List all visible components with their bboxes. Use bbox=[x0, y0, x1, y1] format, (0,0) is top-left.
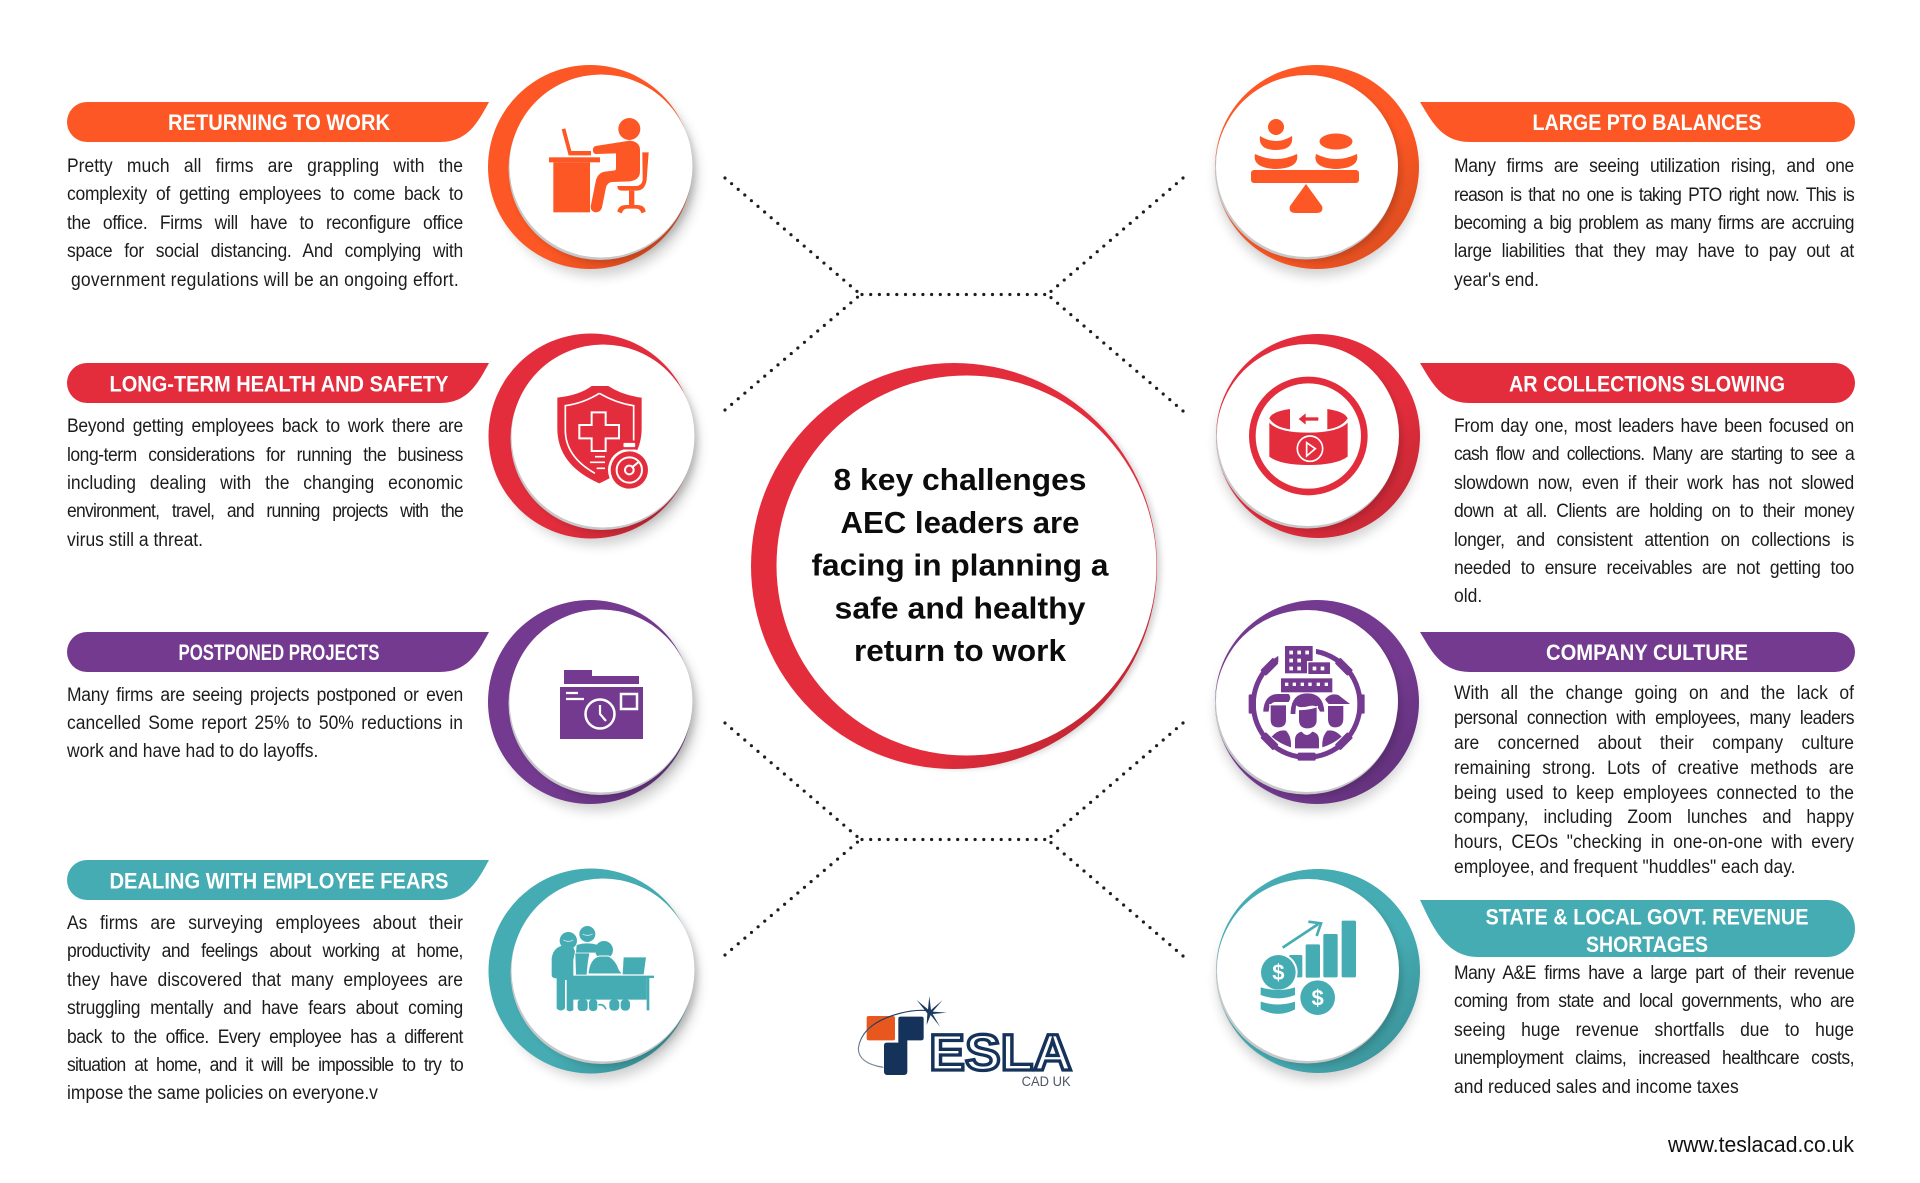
panel: state and local govt revenue shortages bbox=[1213, 869, 1855, 1098]
title: AEC leaders are bbox=[840, 505, 1080, 540]
text: returning to work: complexity of getting employees to come back to bbox=[67, 184, 463, 205]
text: state and local govt revenue shortages: and reduced sales and income taxes bbox=[1454, 1077, 1739, 1098]
badge: company culture bbox=[1212, 600, 1422, 816]
logo: Tesla CAD UK bbox=[858, 996, 1073, 1089]
badge: long-term health and safety bbox=[488, 334, 703, 550]
text: postponed projects: cancelled Some report 25% to 50% reductions in bbox=[67, 713, 463, 734]
text: dealing with employee fears: they have discovered that many employees are bbox=[67, 970, 463, 991]
heading: dealing with employee fears: DEALING WITH EMPLOYEE FEARS bbox=[110, 868, 448, 894]
text: returning to work bbox=[67, 156, 463, 291]
heading: large pto balances bbox=[1420, 102, 1855, 142]
text: long-term health and safety: environment, travel, and running projects with the bbox=[67, 501, 463, 522]
title bbox=[812, 462, 1109, 668]
heading: ar collections slowing bbox=[1420, 363, 1855, 403]
icon: bars and coins bbox=[1259, 921, 1356, 1015]
logo mark: star bbox=[917, 996, 947, 1027]
central title circle bbox=[751, 363, 1163, 771]
icon: gear with buildings and team bbox=[1249, 639, 1365, 761]
panel: company culture bbox=[1212, 600, 1855, 878]
logo wordmark: ESLA bbox=[929, 1024, 1072, 1081]
panel: dealing with employee fears bbox=[67, 860, 703, 1104]
icon: rotating band with play button bbox=[1252, 380, 1364, 492]
text: postponed projects: Many firms are seeing projects postponed or even bbox=[67, 684, 463, 706]
text: ar collections slowing: down at all. Clients are holding on to their money bbox=[1454, 501, 1854, 522]
text: state and local govt revenue shortages bbox=[1454, 963, 1854, 1098]
text: large pto balances: becoming a big problem as many firms are accruing bbox=[1454, 213, 1854, 234]
text: ar collections slowing: slowdown now, even if their work has not slowed bbox=[1454, 473, 1854, 494]
panel: AR collections slowing bbox=[1213, 334, 1855, 607]
text: state and local govt revenue shortages: Many A&E firms have a large part of their revenue bbox=[1454, 963, 1854, 984]
website url: www.teslacad.co.uk bbox=[1667, 1132, 1855, 1157]
text: state and local govt revenue shortages: coming from state and local governments, who are bbox=[1454, 991, 1854, 1012]
text: large pto balances: year's end. bbox=[1454, 270, 1539, 291]
text: company culture: company, including Zoom lunches and happy bbox=[1454, 807, 1854, 828]
heading: postponed projects: POSTPONED PROJECTS bbox=[178, 640, 380, 665]
heading: large pto balances: LARGE PTO BALANCES bbox=[1532, 110, 1762, 135]
icon: folder with clock bbox=[560, 670, 643, 739]
text: postponed projects: work and have had to do layoffs. bbox=[67, 741, 318, 762]
heading: dealing with employee fears bbox=[67, 860, 489, 900]
text: state and local govt revenue shortages: unemployment claims, increased healthcare costs, bbox=[1454, 1048, 1854, 1069]
text: returning to work: Pretty much all firms are grappling with the bbox=[67, 156, 463, 177]
text: large pto balances: large liabilities that they may have to pay out at bbox=[1454, 241, 1854, 262]
title: 8 key challenges bbox=[834, 462, 1086, 497]
badge: ar collections slowing bbox=[1213, 334, 1423, 550]
title: facing in planning a bbox=[812, 548, 1109, 582]
text: dealing with employee fears: As firms are surveying employees about their bbox=[67, 913, 463, 934]
text: returning to work: government regulations will be an ongoing effort. bbox=[71, 270, 459, 291]
badge: state and local govt revenue shortages bbox=[1213, 869, 1423, 1085]
text: ar collections slowing bbox=[1454, 416, 1855, 607]
heading: returning to work: RETURNING TO WORK bbox=[168, 110, 390, 135]
text: dealing with employee fears: impose the same policies on everyone.v bbox=[67, 1083, 378, 1104]
text: long-term health and safety: including dealing with the changing economic bbox=[67, 473, 463, 494]
panel: postponed projects bbox=[67, 600, 702, 816]
icon: shield with stopwatch bbox=[557, 386, 651, 491]
badge: large pto balances bbox=[1212, 65, 1422, 281]
badge: dealing with employee fears bbox=[488, 868, 703, 1085]
connector: upper dotted lines bbox=[723, 176, 1185, 413]
icon: people around desk bbox=[552, 926, 654, 1011]
heading: long-term health and safety bbox=[67, 363, 489, 403]
icon: balance scale bbox=[1251, 119, 1359, 213]
text: company culture bbox=[1454, 683, 1854, 878]
text: long-term health and safety: virus still a threat. bbox=[67, 530, 203, 551]
connector: lower dotted lines bbox=[723, 721, 1185, 958]
text: returning to work: space for social distancing. And complying with bbox=[67, 241, 463, 262]
badge: returning to work bbox=[488, 65, 702, 281]
text: dealing with employee fears: struggling mentally and have fears about coming bbox=[67, 998, 463, 1019]
text: company culture: remaining strong. Lots of creative methods are bbox=[1454, 758, 1854, 779]
logo mark: orbit arc bbox=[858, 1010, 928, 1067]
text: long-term health and safety bbox=[67, 416, 463, 551]
text: dealing with employee fears: back to the office. Every employee has a different bbox=[67, 1027, 463, 1048]
icon: person at desk bbox=[549, 118, 649, 213]
text: company culture: personal connection with employees, many leaders bbox=[1454, 708, 1854, 729]
logo mark: navy T bbox=[884, 1017, 924, 1075]
text: company culture: are concerned about their company culture bbox=[1454, 733, 1854, 754]
badge: postponed projects bbox=[488, 600, 702, 816]
text: large pto balances bbox=[1454, 156, 1854, 291]
heading: long-term health and safety: LONG-TERM HEALTH AND SAFETY bbox=[110, 372, 449, 396]
heading: company culture: COMPANY CULTURE bbox=[1546, 640, 1748, 665]
panel: large PTO balances bbox=[1212, 65, 1855, 291]
text: ar collections slowing: longer, and consistent attention on collections is bbox=[1454, 530, 1854, 551]
heading: state and local govt revenue shortages: SHORTAGES bbox=[1586, 932, 1708, 957]
text: company culture: With all the change going on and the lack of bbox=[1454, 683, 1854, 704]
heading: postponed projects bbox=[67, 632, 489, 672]
text: ar collections slowing: old. bbox=[1454, 586, 1482, 607]
text: company culture: employee, and frequent "huddles" each day. bbox=[1454, 857, 1796, 878]
heading: ar collections slowing: AR COLLECTIONS SLOWING bbox=[1509, 372, 1785, 396]
heading: state and local govt revenue shortages bbox=[1420, 900, 1855, 957]
panel: returning to work bbox=[67, 65, 702, 291]
icon: bars and coins: $ bbox=[1272, 960, 1284, 985]
heading: returning to work bbox=[67, 102, 489, 142]
title: return to work bbox=[854, 633, 1067, 668]
text: large pto balances: reason is that no one is taking PTO right now. This is bbox=[1454, 185, 1854, 206]
text: state and local govt revenue shortages: seeing huge revenue shortfalls due to huge bbox=[1454, 1020, 1854, 1041]
text: dealing with employee fears: productivity and feelings about working at home, bbox=[67, 941, 463, 962]
text: ar collections slowing: From day one, most leaders have been focused on bbox=[1454, 416, 1854, 437]
heading: company culture bbox=[1420, 632, 1855, 672]
panel: long-term health and safety bbox=[67, 334, 703, 551]
logo mark: orange square bbox=[867, 1016, 895, 1040]
title: safe and healthy bbox=[834, 590, 1086, 626]
text: long-term health and safety: long-term considerations for running the business bbox=[67, 445, 463, 466]
text: long-term health and safety: Beyond getting employees back to work there are bbox=[67, 416, 463, 437]
text: ar collections slowing: cash flow and collections. Many are starting to see a bbox=[1454, 444, 1854, 465]
text: company culture: hours, CEOs "checking in one-on-one with every bbox=[1454, 832, 1854, 853]
text: dealing with employee fears: situation at home, and it will be impossible to try to bbox=[67, 1055, 463, 1076]
logo subtext: CAD UK bbox=[1022, 1073, 1071, 1089]
text: postponed projects bbox=[67, 684, 463, 762]
text: large pto balances: Many firms are seeing utilization rising, and one bbox=[1454, 156, 1854, 177]
text: company culture: being used to keep employees connected to the bbox=[1454, 783, 1854, 804]
icon: bars and coins: $ bbox=[1312, 985, 1324, 1010]
heading: state and local govt revenue shortages: STATE & LOCAL GOVT. REVENUE bbox=[1486, 904, 1808, 930]
text: returning to work: the office. Firms will have to reconfigure office bbox=[67, 213, 463, 234]
text: ar collections slowing: needed to ensure receivables are not getting too bbox=[1454, 558, 1854, 579]
text: dealing with employee fears bbox=[67, 913, 464, 1104]
